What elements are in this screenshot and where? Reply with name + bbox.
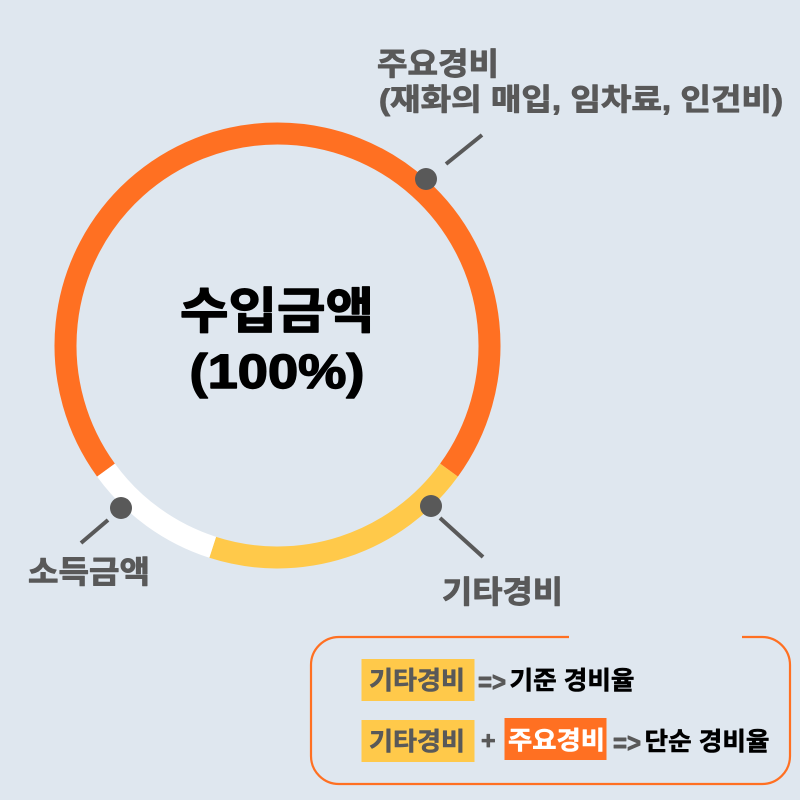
label: 소득금액 <box>28 555 150 590</box>
label <box>377 47 783 117</box>
segment: other expenses <box>213 470 449 557</box>
leader line <box>81 520 108 543</box>
tag: other expenses <box>362 720 474 762</box>
callout: major expenses <box>377 47 783 190</box>
marker dot <box>420 495 442 517</box>
result text: 기준 경비율 <box>510 667 634 695</box>
row 2: simple expense rate <box>362 718 770 762</box>
label: 주요경비 <box>377 47 499 82</box>
segment: income <box>106 470 213 547</box>
tag: other expenses <box>362 659 474 701</box>
tag text: 주요경비 <box>508 727 605 755</box>
marker dot <box>415 168 437 190</box>
leader line <box>440 518 483 557</box>
label: (재화의 매입, 임차료, 인건비) <box>379 84 783 117</box>
segment: major expenses <box>65 133 489 470</box>
tag text: 기타경비 <box>369 728 465 756</box>
label: 기타경비 <box>442 575 563 610</box>
plus sign: + <box>481 727 496 755</box>
row 1: standard expense rate <box>362 659 634 701</box>
marker dot <box>110 497 132 519</box>
callout: other expenses <box>420 495 563 610</box>
leader line <box>446 135 482 164</box>
legend panel <box>311 637 790 784</box>
center title <box>180 285 374 399</box>
panel border <box>311 637 790 784</box>
donut chart <box>65 133 489 557</box>
result text: 단순 경비율 <box>644 728 770 756</box>
arrow: => <box>478 667 506 697</box>
tag: major expenses <box>504 718 606 760</box>
arrow: => <box>613 728 641 758</box>
center title: (100%) <box>190 346 364 399</box>
callout: income <box>28 497 150 590</box>
center title: 수입금액 <box>180 285 374 339</box>
tag text: 기타경비 <box>369 667 465 695</box>
